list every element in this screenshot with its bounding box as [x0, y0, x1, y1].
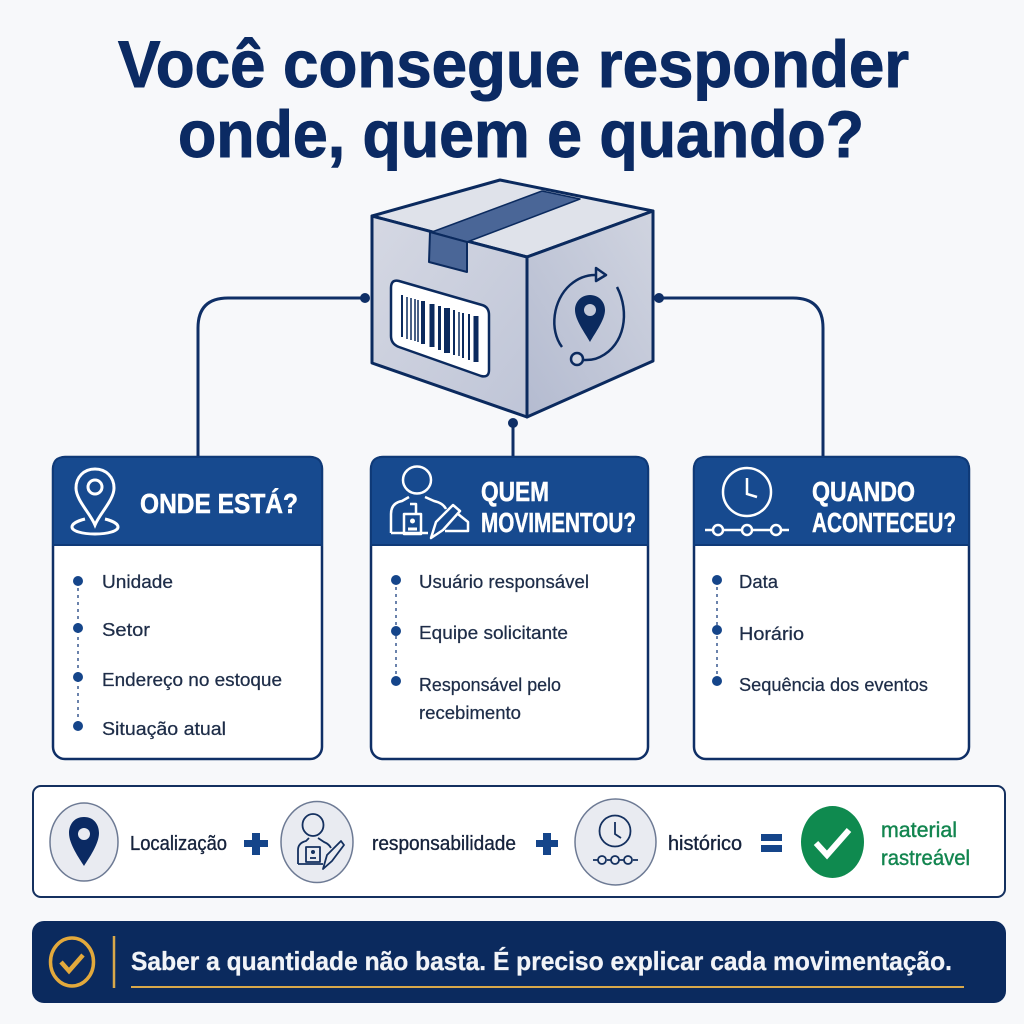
- icon: responsibility: [281, 802, 353, 882]
- label: localização: Localização: [130, 833, 227, 855]
- divider: [113, 936, 115, 988]
- list: onde está: Setor: [102, 619, 150, 640]
- icon: location: [50, 803, 118, 881]
- panel: onde está: [53, 457, 322, 759]
- underline: [131, 986, 964, 988]
- label: material rastreável: [881, 819, 970, 870]
- header: quem movimentou: QUEM: [481, 476, 549, 507]
- icon: green check: [801, 806, 864, 878]
- title: Você consegue responder: [118, 27, 909, 101]
- list: quem movimentou: recebimento: [419, 702, 521, 723]
- label: material rastreável: material: [881, 819, 957, 842]
- list: quem movimentou: Responsável pelo: [419, 674, 561, 695]
- header: quando aconteceu: QUANDO: [812, 476, 915, 507]
- panel: quem movimentou: [371, 457, 648, 759]
- list: quando aconteceu: Sequência dos eventos: [739, 674, 928, 695]
- connector: middle line: [508, 418, 518, 457]
- panel: formula: [33, 786, 1005, 897]
- icon: location pin with tracking arrows: [554, 268, 624, 365]
- list: quem movimentou: [391, 571, 589, 723]
- header: onde está: ONDE ESTÁ?: [140, 488, 298, 519]
- connector: left line: [198, 293, 370, 457]
- title: onde, quem e quando?: [178, 97, 864, 171]
- title: [118, 27, 909, 171]
- list: quem movimentou: Usuário responsável: [419, 571, 589, 592]
- list: quem movimentou: Equipe solicitante: [419, 622, 568, 643]
- label: responsabilidade: responsabilidade: [372, 833, 516, 855]
- icon: history: [575, 799, 656, 885]
- header: quem movimentou: MOVIMENTOU?: [481, 507, 636, 538]
- label: histórico: histórico: [668, 833, 742, 855]
- list: onde está: Unidade: [102, 571, 173, 592]
- label: material rastreável: rastreável: [881, 847, 970, 870]
- header: quem movimentou: [371, 457, 648, 545]
- header: onde está: [53, 457, 322, 545]
- list: quando aconteceu: [712, 571, 928, 695]
- barcode label: [391, 281, 489, 376]
- header: quando aconteceu: ACONTECEU?: [812, 507, 956, 538]
- panel: quando aconteceu: [694, 457, 969, 759]
- connector: right line: [654, 293, 823, 457]
- icon: gold check: [50, 938, 94, 986]
- list: quando aconteceu: Data: [739, 571, 779, 592]
- icon: package box: [372, 180, 653, 417]
- plus sign: [536, 833, 558, 855]
- list: onde está: Situação atual: [102, 718, 226, 739]
- header: quando aconteceu: [694, 457, 969, 545]
- callout banner: [32, 921, 1006, 1003]
- list: quando aconteceu: Horário: [739, 623, 804, 644]
- plus sign: [244, 833, 268, 855]
- callout text: Saber a quantidade não basta. É preciso explicar cada movimentação.: [131, 946, 952, 976]
- list: onde está: Endereço no estoque: [102, 669, 282, 690]
- list: onde está: [73, 571, 282, 739]
- equals sign: [761, 834, 782, 852]
